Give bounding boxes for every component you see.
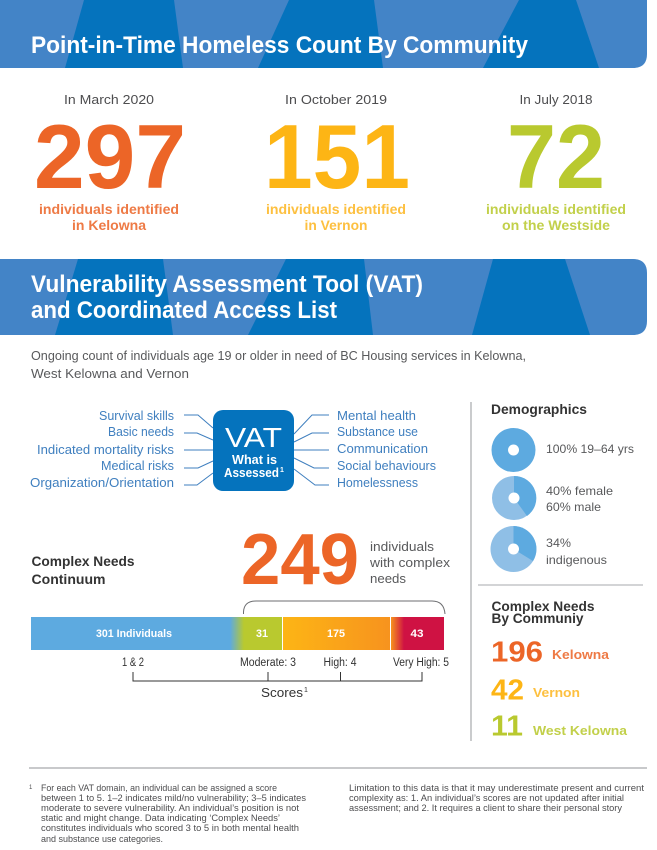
stat: Kelowna 297: individuals identified [39,201,179,217]
footnote right [349,783,644,814]
VAT diagram [30,409,436,491]
community: Kelowna: Kelowna [552,647,610,662]
stat: Westside 72 [486,92,626,233]
continuum bar chart: 43 [410,628,424,640]
community: West Kelowna [491,710,628,742]
complex needs heading: Complex Needs [32,554,134,569]
pie: indigenous [490,526,536,572]
gender label: 60% male [546,500,601,514]
community: Kelowna: 196 [491,636,543,668]
footnote left: 1 [29,785,33,791]
left domain labels: Survival skills [99,409,174,423]
intro text: Ongoing count of individuals age 19 or older in need of BC Housing services in Kelowna, [31,348,526,363]
complex needs caption: needs [370,571,407,586]
score labels: High: 4 [324,657,357,669]
stat: Westside 72: In July 2018 [520,92,592,107]
demographics heading: Demographics [491,402,587,417]
footnote right: assessment; and 2. It requires a client to share their personal story [349,803,622,814]
right domain labels: Mental health [337,409,416,423]
community: Kelowna [491,636,610,668]
VAT box: 1 [280,467,284,474]
header banner: point-in-time count [0,0,647,68]
community: Vernon: 42 [491,674,524,706]
by community heading: By Communiy [492,611,584,626]
stat: Vernon 151: In October 2019 [285,92,387,107]
left domain labels: Organization/Orientation [30,476,174,490]
continuum bar chart [31,601,449,700]
footnote right: complexity as: 1. An individual’s scores are not updated after initial [349,793,624,804]
scores label: Scores [261,685,304,700]
by community heading: Complex Needs [492,599,594,614]
VAT box: VAT [225,422,282,453]
community: West Kelowna: 11 [491,710,523,742]
bracket above bar [244,601,445,614]
continuum bar chart: 301 Individuals [96,628,172,640]
indigenous label: 34% [546,536,571,550]
continuum bar chart: 1 [304,687,308,694]
connector lines [184,415,329,485]
footnote right: Limitation to this data is that it may underestimate present and current [349,783,644,794]
demographics panel [490,402,634,572]
stat: Vernon 151: in Vernon [304,217,368,233]
footnote left: constitutes individuals who scored 3 to 5 in both mental health [41,823,299,834]
stat: Westside 72: on the Westside [502,217,610,233]
complex needs heading: Continuum [32,572,106,587]
footnote left: static and might change. Data indicating ‘Complex Needs’ [41,813,280,824]
stat: Westside 72: 72 [507,107,605,208]
continuum bar chart: 175 [327,628,345,640]
footnote left: For each VAT domain, an individual can be assigned a score [41,783,277,794]
score labels: Very High: 5 [393,657,449,669]
score labels [122,657,449,669]
header banner: VAT [0,259,647,335]
stat: Kelowna 297: 297 [34,107,186,208]
stat: Vernon 151: 151 [264,107,410,208]
stat: Vernon 151 [264,92,410,233]
complex needs caption: individuals [370,539,435,554]
VAT box [213,410,294,491]
pie: gender [492,476,536,520]
gender label: 40% female [546,484,613,498]
community: Vernon: Vernon [533,685,580,700]
right domain labels: Homelessness [337,476,418,490]
right domain labels [337,409,436,490]
stat: Kelowna 297: In March 2020 [64,92,154,107]
left domain labels: Medical risks [101,459,174,473]
footnote left: moderate to severe vulnerability. An individual’s position is not [41,803,299,814]
continuum bar chart: 31 [256,628,268,640]
footnote left [29,783,306,845]
scores bracket [133,672,422,681]
stat: Kelowna 297: in Kelowna [72,217,146,233]
age label: 100% 19–64 yrs [546,442,634,456]
indigenous label: indigenous [546,553,607,567]
score labels: 1 & 2 [122,657,144,669]
title: VAT: Vulnerability Assessment Tool (VAT) [31,271,423,298]
footnote left: between 1 to 5. 1–2 indicates mild/no vulnerability; 3–5 indicates [41,793,306,804]
VAT box: What is [232,453,277,467]
left domain labels [30,409,174,490]
score labels: Moderate: 3 [240,657,296,669]
VAT box: Assessed [224,466,279,480]
title: point-in-time: Point-in-Time Homeless Count By Community [31,32,529,59]
right domain labels: Social behaviours [337,459,436,473]
complex needs caption: with complex [369,555,451,570]
intro text: West Kelowna and Vernon [31,366,189,381]
right domain labels: Substance use [337,425,418,439]
right domain labels: Communication [337,442,428,456]
stat: Westside 72: individuals identified [486,201,626,217]
complex needs by community panel [491,599,628,742]
big number 249: 249 [241,520,359,600]
left domain labels: Indicated mortality risks [37,443,174,457]
title: VAT: and Coordinated Access List [31,297,337,324]
footnote left: and substance use categories. [41,834,163,845]
stat: Vernon 151: individuals identified [266,201,406,217]
community: Vernon [491,674,580,706]
left domain labels: Basic needs [108,425,174,439]
pie: age [492,428,536,472]
community: West Kelowna: West Kelowna [533,723,628,738]
